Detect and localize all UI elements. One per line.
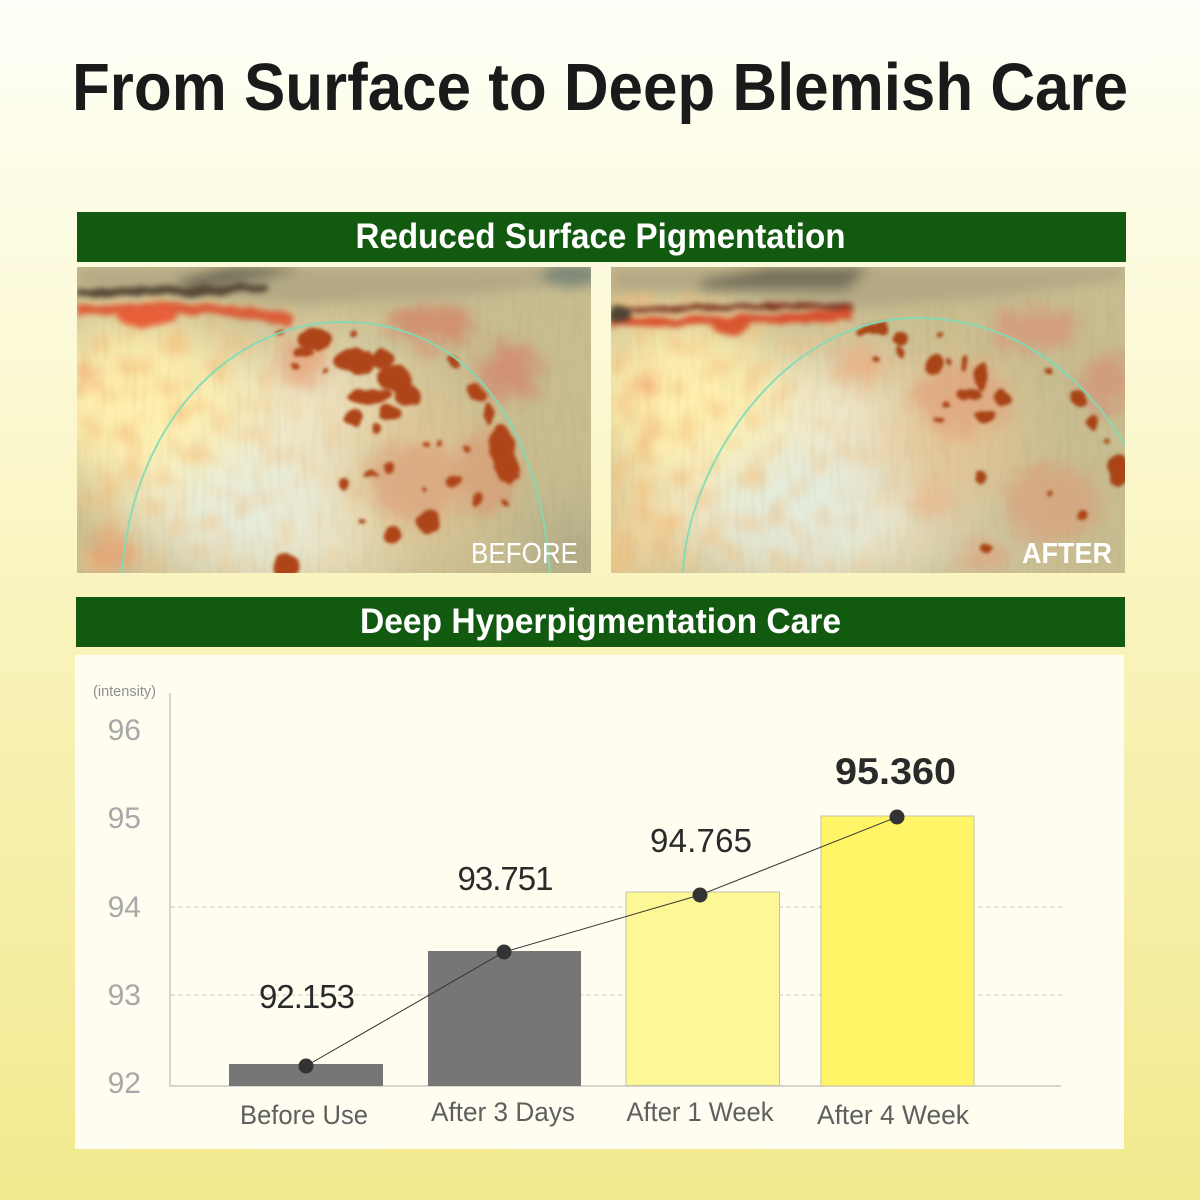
- panel: deep hyperpigmentation heading: Deep Hyperpigmentation Care: [360, 602, 841, 641]
- category labels: [240, 1097, 969, 1130]
- y axis labels: [93, 683, 156, 1100]
- category labels: After 3 Days: [431, 1097, 575, 1127]
- reddish patches: [75, 305, 539, 572]
- bar chart: [93, 683, 1065, 1130]
- y axis labels: 96: [108, 714, 141, 747]
- value labels: 94.765: [650, 822, 752, 859]
- trend line: [298, 810, 904, 1074]
- y axis labels: 92: [108, 1067, 141, 1100]
- bar: after 1 week: [626, 892, 780, 1086]
- annotation arc: [683, 318, 1125, 573]
- panel: chart background: [75, 655, 1124, 1149]
- value labels: 92.153: [259, 978, 355, 1015]
- bar: before use: [229, 1064, 383, 1086]
- annotation arc: [122, 322, 550, 573]
- eyebrow band: [77, 263, 602, 305]
- eyebrow band: [611, 267, 1125, 309]
- pigmentation spots: [273, 328, 522, 580]
- category labels: After 1 Week: [626, 1097, 774, 1127]
- panel: deep hyperpigmentation heading: [76, 597, 1125, 647]
- title: From Surface to Deep Blemish Care: [72, 50, 1128, 125]
- value labels: 93.751: [458, 860, 554, 897]
- before photo: [77, 267, 591, 573]
- category labels: After 4 Week: [817, 1100, 969, 1130]
- pigmentation spots: [854, 322, 1129, 554]
- grid lines and axes: [170, 693, 1065, 1086]
- label: after: AFTER: [1022, 538, 1112, 570]
- y axis labels: 93: [108, 979, 141, 1012]
- reddish patches: [634, 307, 1132, 569]
- bar: after 4 week: [821, 816, 974, 1086]
- value labels: [259, 751, 956, 1015]
- y axis labels: (intensity): [93, 683, 156, 700]
- y axis labels: 95: [108, 802, 141, 835]
- after photo: [611, 267, 1125, 573]
- label: before: BEFORE: [471, 538, 578, 570]
- y axis labels: 94: [108, 891, 141, 924]
- category labels: Before Use: [240, 1100, 368, 1130]
- value labels: 95.360: [835, 751, 956, 792]
- panel: reduced surface pigmentation heading: Reduced Surface Pigmentation: [356, 217, 846, 256]
- bar: after 3 days: [428, 951, 581, 1086]
- panel: reduced surface pigmentation heading: [77, 212, 1126, 262]
